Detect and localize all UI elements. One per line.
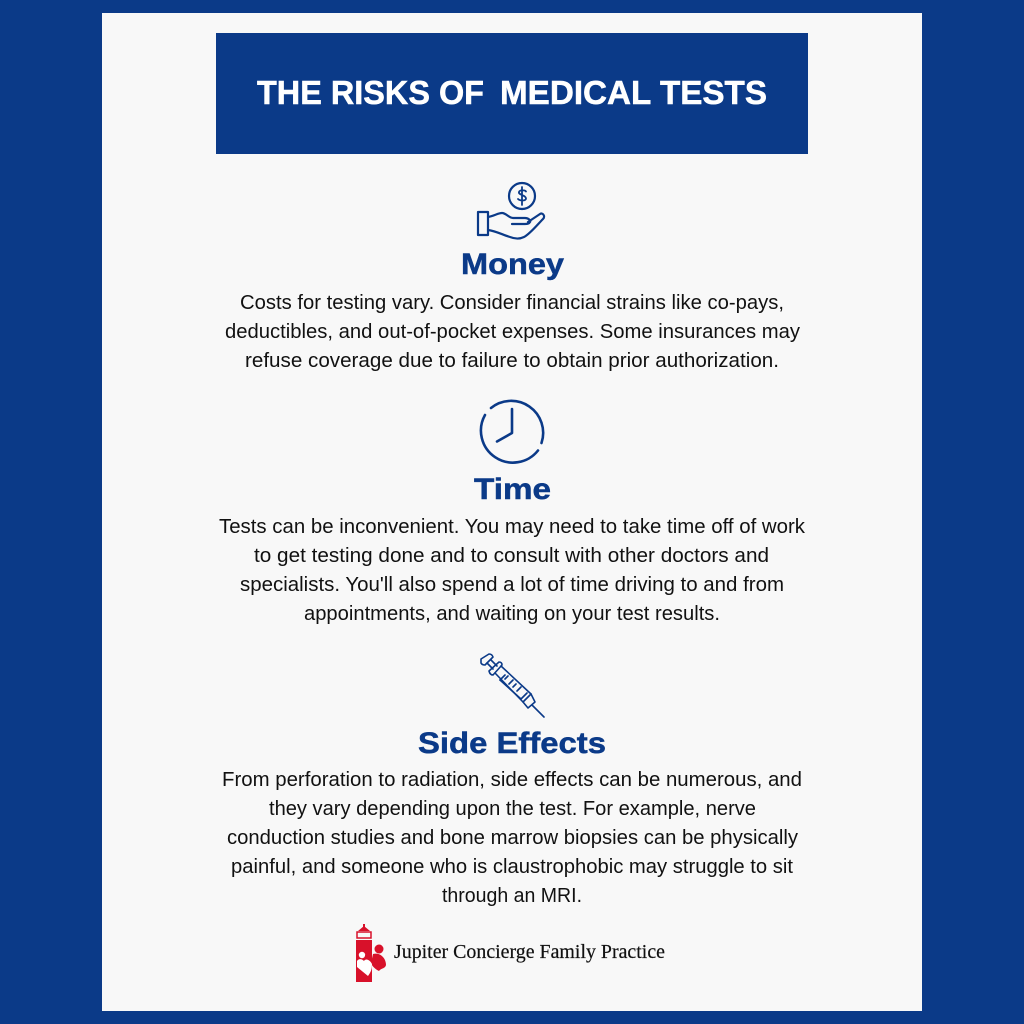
text: side effects description [222, 769, 802, 907]
text: money description: refuse coverage due to failure to obtain prior authorization. [245, 350, 779, 372]
text: side effects description: conduction studies and bone marrow biopsies can be physically [227, 827, 798, 849]
title banner: THE RISKS OF [257, 74, 484, 111]
logo wordmark: Jupiter Concierge Family Practice [394, 941, 665, 963]
text: side effects description: painful, and someone who is claustrophobic may struggle to sit [231, 856, 793, 878]
text: side effects description: From perforation to radiation, side effects can be numerous, and [222, 769, 802, 791]
text: side effects description: they vary depending upon the test. For example, nerve [269, 798, 756, 820]
main white panel [102, 13, 922, 1011]
icon: syringe [481, 654, 544, 717]
text: time description: Tests can be inconvenient. You may need to take time off of work [219, 516, 806, 538]
heading: Money: Money [461, 248, 564, 281]
text: time description: appointments, and waiting on your test results. [304, 603, 720, 625]
logo: Jupiter Concierge Family Practice [356, 924, 665, 982]
text: money description [225, 292, 800, 372]
text: time description: specialists. You'll also spend a lot of time driving to and from [240, 574, 784, 596]
text: time description: to get testing done and to consult with other doctors and [254, 545, 769, 567]
text: money description: Costs for testing vary. Consider financial strains like co-pays, [240, 292, 784, 314]
icon: clock [481, 401, 543, 463]
text: money description: deductibles, and out-of-pocket expenses. Some insurances may [225, 321, 800, 343]
heading: Side Effects: Side Effects [418, 727, 606, 760]
title banner: MEDICAL TESTS [500, 74, 767, 111]
icon: red lighthouse and family [356, 924, 386, 982]
title banner [216, 33, 808, 154]
text: side effects description: through an MRI. [442, 885, 582, 907]
text: time description [219, 516, 806, 625]
heading: Time: Time [474, 473, 551, 506]
icon: hand holding coin [478, 183, 544, 238]
